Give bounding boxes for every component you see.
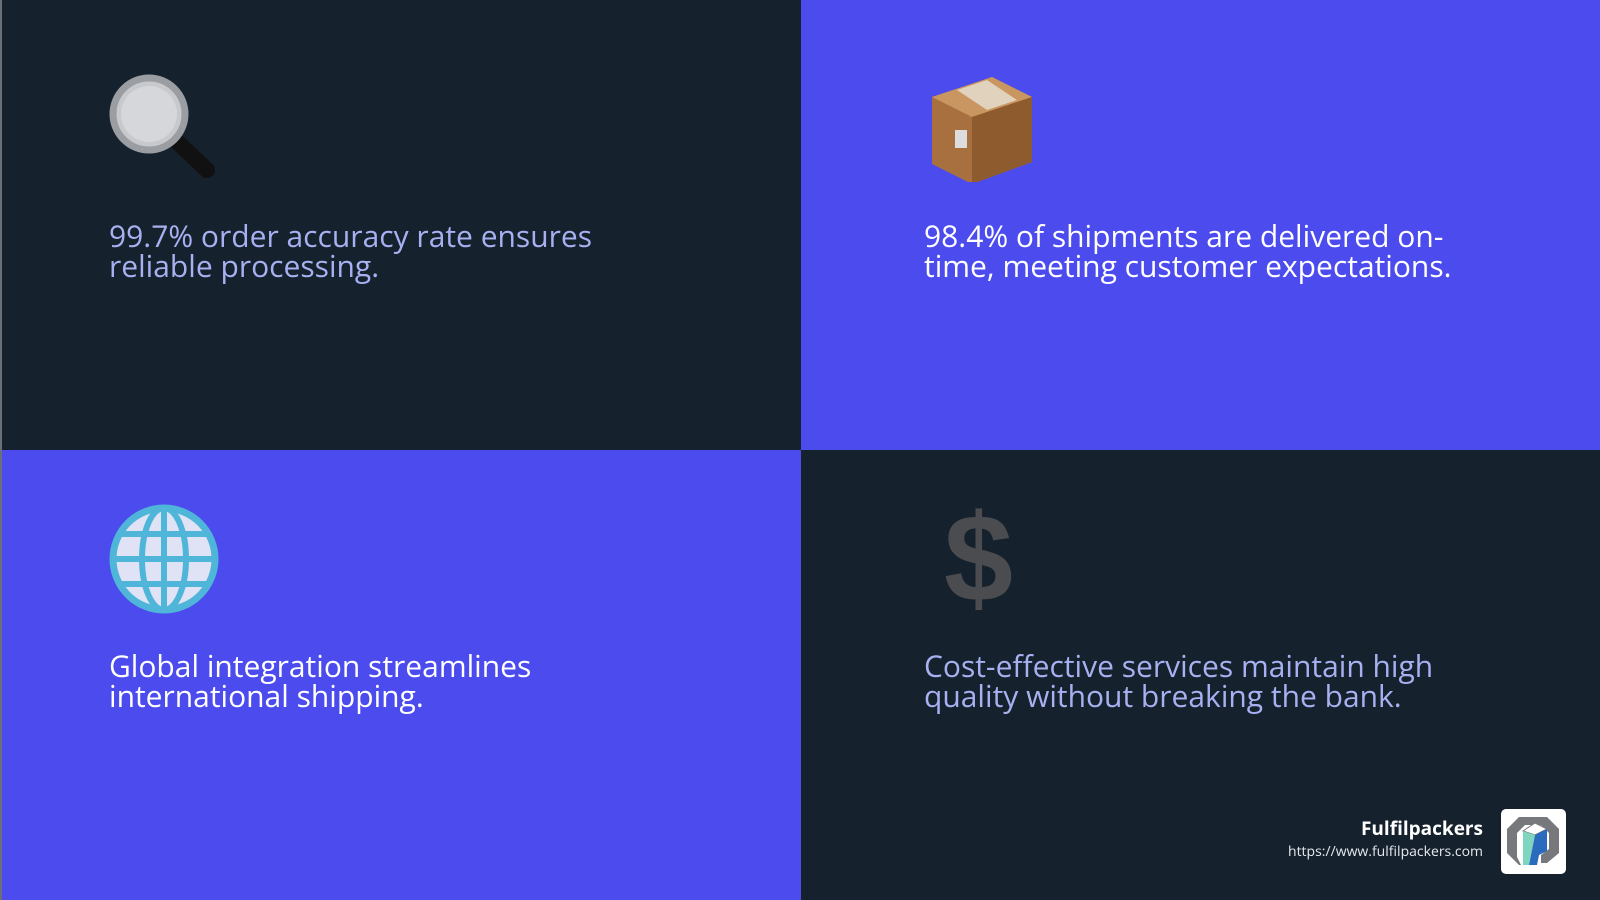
panel: cost <box>801 450 1600 900</box>
text: accuracy <box>109 215 592 286</box>
text: accuracy: reliable processing. <box>109 245 379 286</box>
text: on-time: 98.4% of shipments are delivered on- <box>924 215 1443 256</box>
text: cost: quality without breaking the bank. <box>924 675 1402 716</box>
brand text: https://www.fulfilpackers.com <box>1288 842 1483 861</box>
panel: on-time delivery <box>801 0 1600 450</box>
brand text: Fulfilpackers <box>1361 815 1483 841</box>
brand text <box>1288 815 1483 861</box>
panel: global <box>0 450 801 900</box>
icon: magnifier <box>110 74 215 178</box>
text: on-time: time, meeting customer expectations. <box>924 245 1452 286</box>
logo <box>1501 809 1566 874</box>
icon: globe <box>110 504 218 614</box>
text: cost <box>924 645 1433 716</box>
icon: box <box>932 77 1032 182</box>
text: on-time <box>924 215 1452 286</box>
text: accuracy: 99.7% order accuracy rate ensures <box>109 215 592 256</box>
text: global <box>109 645 531 716</box>
text: global: international shipping. <box>109 675 424 716</box>
text: global: Global integration streamlines <box>109 645 531 686</box>
text: cost: Cost-effective services maintain high <box>924 645 1433 686</box>
icon: dollar: $ <box>944 490 1013 628</box>
panel: accuracy <box>0 0 801 450</box>
